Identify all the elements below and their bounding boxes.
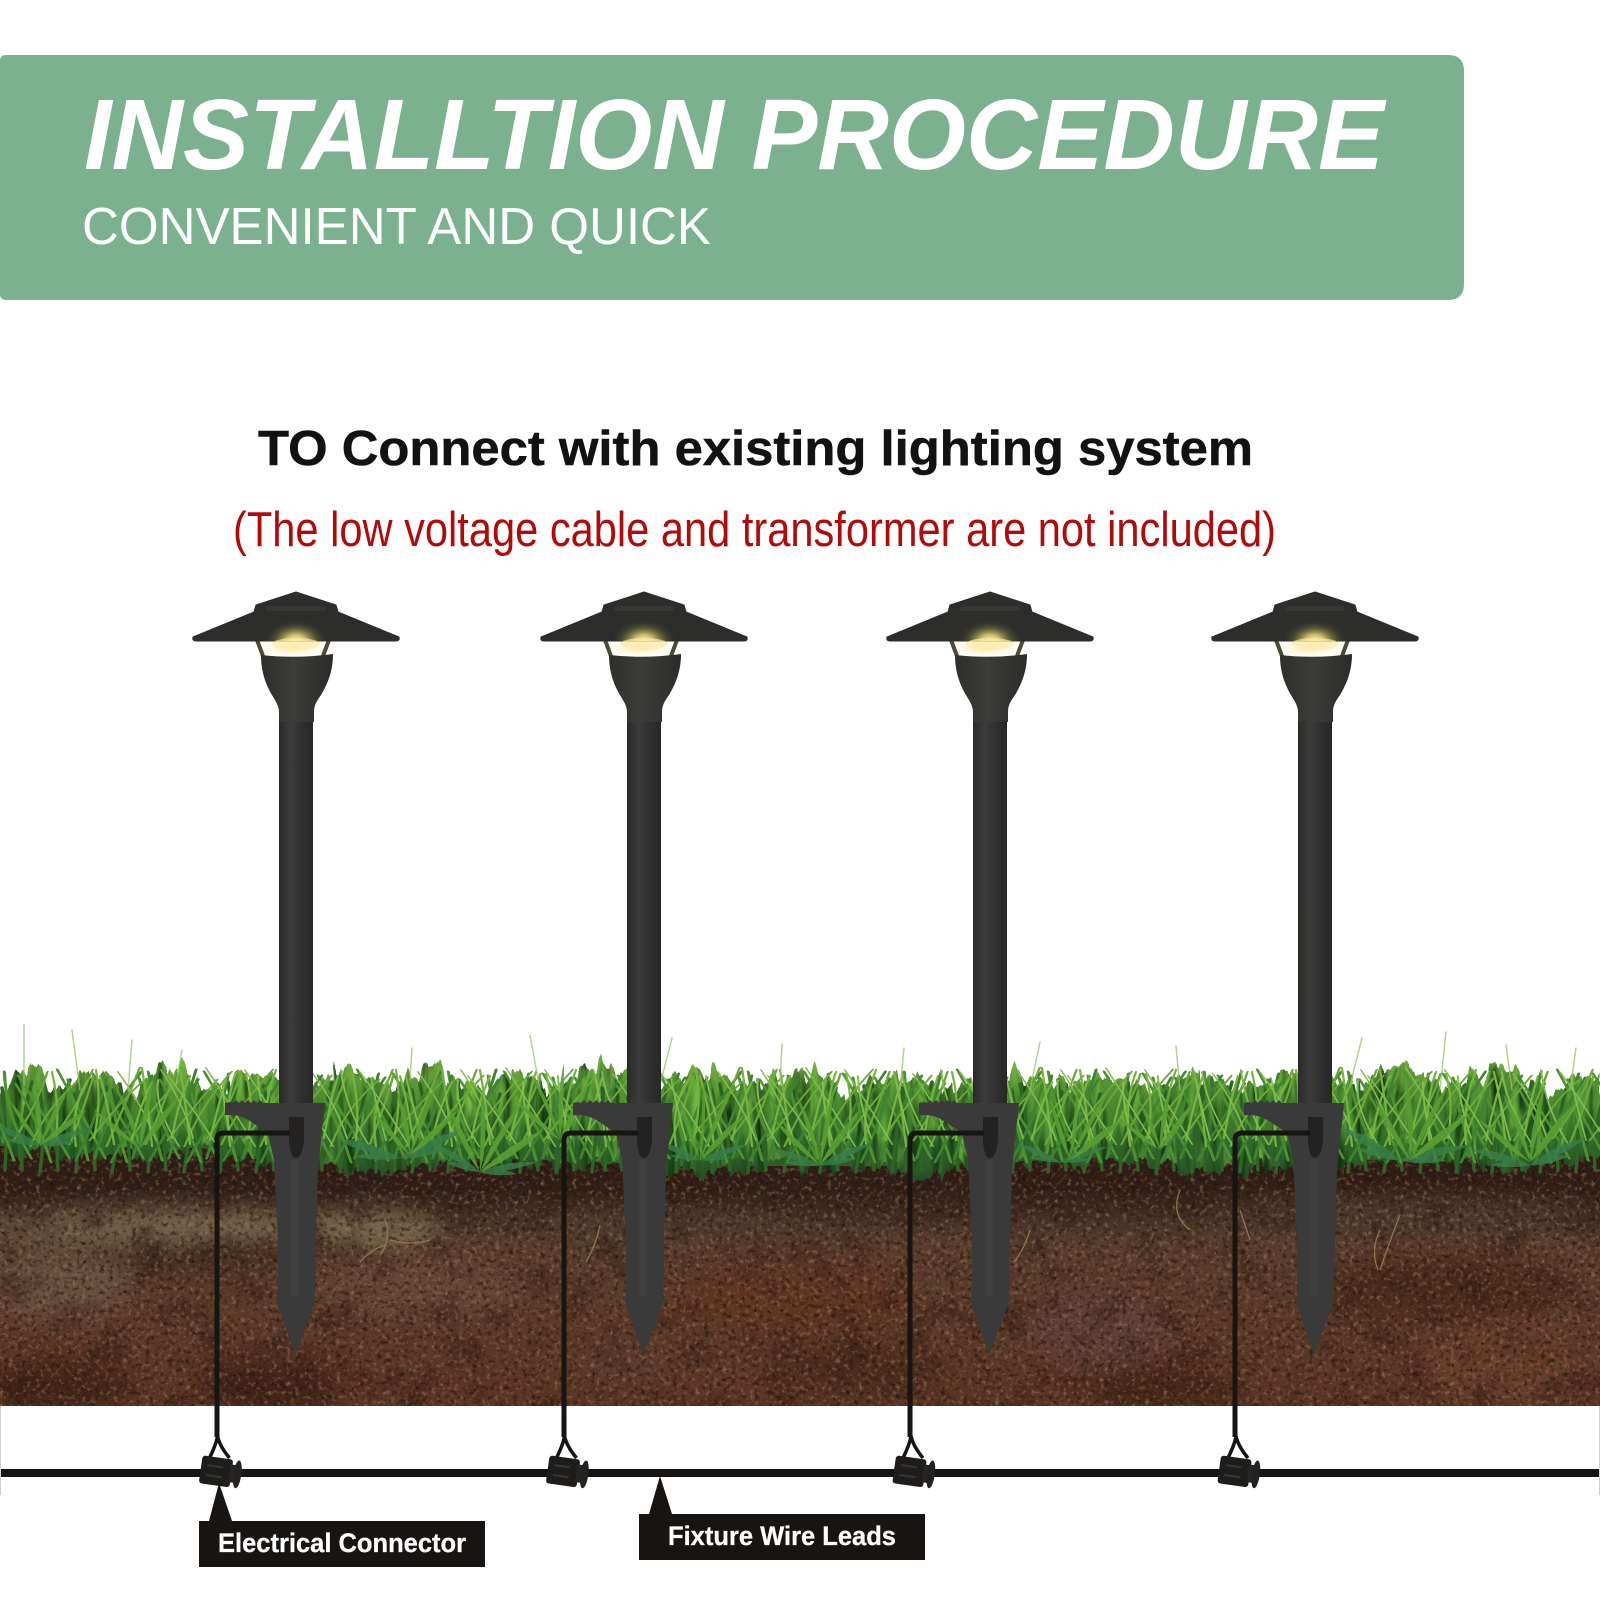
ground stake [1244, 1100, 1344, 1355]
grass band [0, 1025, 1600, 1183]
callout label: Electrical Connector [218, 1528, 466, 1558]
callout: fixture wire leads [639, 1476, 925, 1560]
callout label: Fixture Wire Leads [668, 1521, 896, 1551]
low voltage main cable [0, 1469, 1600, 1477]
callout: electrical connector [199, 1483, 485, 1567]
lamp post [973, 705, 1007, 1110]
header banner [0, 55, 1464, 300]
lamp glow [268, 623, 324, 641]
stake slot [1308, 1117, 1323, 1158]
lamp cup [955, 654, 1027, 722]
stake slot [637, 1117, 652, 1158]
title: INSTALLTION PROCEDURE [84, 79, 1387, 191]
heading: connect with existing system: TO Connect with existing lighting system [258, 422, 1253, 476]
lamp struts [605, 640, 677, 656]
lamp light window [1277, 641, 1341, 657]
connector 3 [892, 1433, 940, 1489]
window hot spot [272, 638, 320, 650]
lamp light window [258, 641, 322, 657]
lamp hat [887, 592, 1093, 641]
lamp struts [1276, 640, 1348, 656]
lamp struts [951, 640, 1023, 656]
connector 4 [1217, 1433, 1265, 1489]
lamp glow [1288, 623, 1342, 641]
lamp cup [1280, 654, 1352, 722]
lamp hat [1212, 592, 1418, 641]
lamp glow [962, 623, 1018, 641]
lamp 4 [1212, 592, 1418, 1355]
lamp glow [616, 623, 672, 641]
lamp 3 [887, 592, 1093, 1355]
note: items not included: (The low voltage cable and transformer are not included) [233, 503, 1276, 557]
ground stake [919, 1100, 1019, 1355]
lamp post [279, 705, 313, 1110]
lamp hat [541, 592, 747, 641]
lamp post [1298, 705, 1332, 1110]
hat rim [614, 606, 674, 611]
stake ridge [639, 1160, 647, 1296]
connector 2 [546, 1433, 593, 1489]
frame edge lines [0, 1406, 1600, 1495]
ground stake [225, 1100, 325, 1355]
lamp 2 [541, 592, 747, 1355]
fixture wire leads [217, 1133, 1310, 1437]
lamp 1 [193, 592, 399, 1355]
window hot spot [1291, 638, 1339, 650]
connector 1 [199, 1433, 246, 1489]
soil cross-section [0, 1140, 1600, 1411]
window hot spot [966, 638, 1014, 650]
lamp light window [952, 641, 1016, 657]
lamp cup [261, 654, 333, 722]
lamp cup [609, 654, 681, 722]
upper leaf tufts [5, 1058, 1583, 1183]
stake ridge [1310, 1160, 1318, 1296]
hat rim [1285, 606, 1345, 611]
ground stake [573, 1100, 673, 1355]
hat rim [960, 606, 1020, 611]
stake ridge [985, 1160, 993, 1296]
hat rim [266, 606, 326, 611]
lamp light window [606, 641, 670, 657]
subtitle: CONVENIENT AND QUICK [82, 198, 711, 256]
soil roots [360, 1190, 1400, 1270]
lamp hat [193, 592, 399, 641]
lamp struts [257, 640, 329, 656]
low leaf tufts [0, 1124, 1591, 1181]
stake slot [289, 1117, 304, 1158]
stake ridge [291, 1160, 299, 1296]
window hot spot [620, 638, 668, 650]
stake slot [983, 1117, 998, 1158]
lamp post [627, 705, 661, 1110]
